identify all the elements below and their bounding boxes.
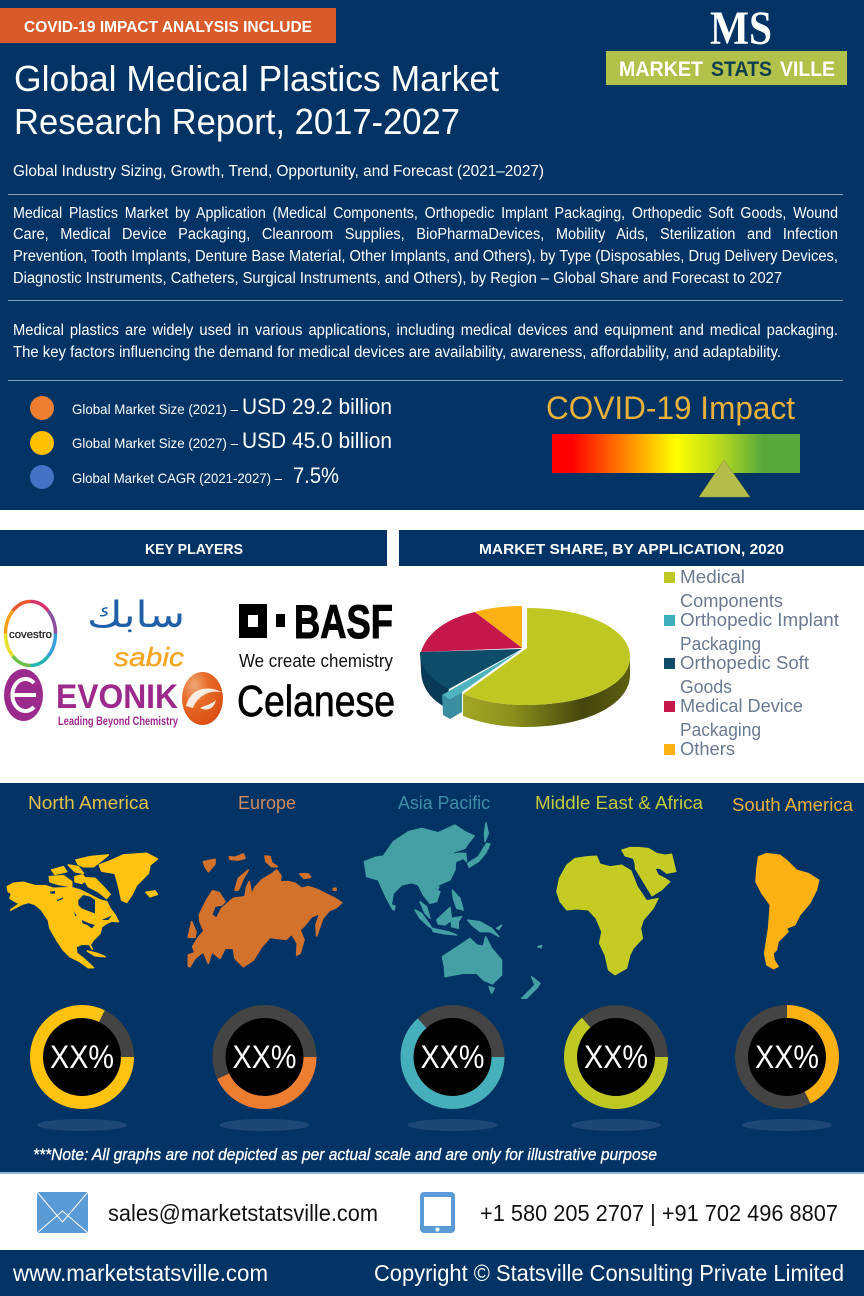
donut: south america: XX% [755, 1039, 819, 1075]
heading: key players [0, 530, 387, 566]
subtitle: Global Industry Sizing, Growth, Trend, Opportunity, and Forecast (2021–2027) [13, 163, 544, 180]
map: south america [756, 853, 819, 969]
donut: europe: XX% [232, 1039, 296, 1075]
contact: email: sales@marketstatsville.com [108, 1200, 378, 1226]
heading: market share: MARKET SHARE, BY APPLICATION, 2020 [479, 541, 784, 558]
slice: medical components side [463, 657, 630, 727]
legend: orthopedic soft goods [664, 653, 809, 697]
slice: others [475, 606, 522, 648]
logo: covestro [5, 602, 55, 666]
donut: europe [219, 1012, 310, 1131]
legend [664, 567, 839, 759]
donut: north america [36, 1012, 128, 1131]
stat: market size 2021 [30, 394, 392, 420]
legend: orthopedic implant packaging [664, 610, 839, 654]
map: middle east and africa [557, 847, 676, 975]
logo: basf: BASF [294, 595, 393, 648]
logo: basf: We create chemistry [239, 651, 393, 671]
footer: website: www.marketstatsville.com [12, 1260, 268, 1286]
slice: orthopedic soft goods [420, 649, 522, 689]
logo: sabic: sabic [114, 642, 184, 672]
logo: evonik [4, 669, 223, 728]
stat: market size 2021: Global Market Size (2021) – [72, 401, 238, 417]
stat: market size 2027 [30, 428, 392, 455]
logo: market stats ville: VILLE [780, 58, 835, 81]
region label: asia pacific: Asia Pacific [398, 793, 490, 813]
donut: asia pacific [407, 1012, 498, 1131]
region label: south america: South America [732, 795, 854, 815]
legend: medical device packaging: Medical Device [680, 696, 803, 716]
text block: description: Medical plastics are widely used in various applications, including medical devices and equipment and medical packaging. [13, 322, 838, 339]
logo: market stats ville: STATS [711, 58, 772, 81]
title [14, 58, 499, 142]
donut: middle east and africa [570, 1012, 662, 1131]
logo: sabic: سابك [87, 595, 185, 636]
legend: medical components: Medical [680, 567, 745, 587]
text block: report scope: Prevention, Tooth Implants, Denture Base Material, Other Implants, and Others), by Type (Disposables, Drug Delivery Devices, [13, 248, 838, 265]
logo: celanese: Celanese [237, 677, 395, 726]
stat: cagr: 7.5% [293, 463, 339, 488]
panel: key player logos [4, 595, 395, 728]
logo: basf [239, 595, 393, 671]
key stats [30, 394, 392, 489]
donut: middle east and africa: XX% [584, 1039, 648, 1075]
legend: orthopedic soft goods: Goods [680, 677, 732, 697]
legend: others: Others [680, 739, 735, 759]
stat: cagr: Global Market CAGR (2021-2027) – [72, 470, 282, 486]
heading: market share [399, 530, 864, 566]
text block: report scope [13, 205, 838, 287]
text block: description: The key factors influencing the demand for medical devices are availability, awareness, affordability, and adaptability. [13, 344, 781, 361]
banner: covid-19 impact analysis: COVID-19 IMPACT ANALYSIS INCLUDE [24, 19, 312, 36]
text block: report scope: Diagnostic Instruments, Catheters, Surgical Instruments, and Others), by Region – Global Share and Forecast to 2027 [13, 270, 782, 287]
icon: phone [420, 1192, 455, 1233]
region label: europe: Europe [238, 793, 296, 813]
footer: copyright: Copyright © Statsville Consulting Private Limited [374, 1260, 844, 1286]
logo: evonik: Leading Beyond Chemistry [58, 714, 178, 728]
banner: covid-19 impact analysis [0, 8, 336, 43]
stat: market size 2021: USD 29.2 billion [242, 394, 392, 419]
logo: sabic [87, 595, 185, 672]
map: europe [188, 854, 342, 967]
legend: medical components [664, 567, 783, 611]
slice side: soft goods [420, 652, 449, 707]
legend: medical device packaging [664, 696, 803, 740]
title: Global Medical Plastics Market [14, 58, 499, 99]
legend: orthopedic implant packaging: Orthopedic Implant [680, 610, 839, 630]
map: asia pacific [364, 823, 542, 998]
stat: market size 2027: USD 45.0 billion [242, 428, 392, 453]
text block: description [13, 322, 838, 361]
donut: asia pacific: XX% [420, 1039, 484, 1075]
legend: medical device packaging: Packaging [680, 720, 761, 740]
logo: evonik: EVONIK [56, 678, 178, 716]
donut: south america [742, 1012, 832, 1131]
title: Research Report, 2017-2027 [14, 101, 460, 142]
logo: covestro: covestro [9, 629, 52, 641]
heading: key players: KEY PLAYERS [145, 541, 243, 558]
slice: orthopedic implant packaging [442, 650, 521, 719]
region label: middle east and africa: Middle East & Africa [535, 793, 704, 813]
slice: medical device packaging [421, 612, 522, 652]
covid-19 impact gauge [546, 390, 800, 497]
legend: orthopedic soft goods: Orthopedic Soft [680, 653, 809, 673]
logo: market stats ville: MARKET [619, 58, 703, 81]
icon: envelope [37, 1192, 88, 1233]
logo: market stats ville: MS [710, 2, 772, 55]
logo: market stats ville [606, 2, 847, 85]
stat: cagr [30, 463, 339, 489]
donut: north america: XX% [50, 1039, 114, 1075]
legend: medical components: Components [680, 591, 783, 611]
contact: phone numbers: +1 580 205 2707 | +91 702 496 8807 [480, 1200, 838, 1226]
slice: medical components [463, 608, 630, 705]
text block: report scope: Care, Medical Device Packaging, Cleanroom Supplies, BioPharmaDevices, Mobility Aids, Sterilization and Infection [13, 226, 838, 243]
note: ***Note: All graphs are not depicted as per actual scale and are only for illustrative purpose [33, 1146, 657, 1164]
covid-19 impact gauge: COVID-19 Impact [546, 390, 795, 426]
map: north america [7, 853, 157, 968]
pie chart [420, 606, 630, 727]
legend: orthopedic implant packaging: Packaging [680, 634, 761, 654]
region label: north america: North America [28, 793, 150, 813]
stat: market size 2027: Global Market Size (2027) – [72, 435, 238, 451]
